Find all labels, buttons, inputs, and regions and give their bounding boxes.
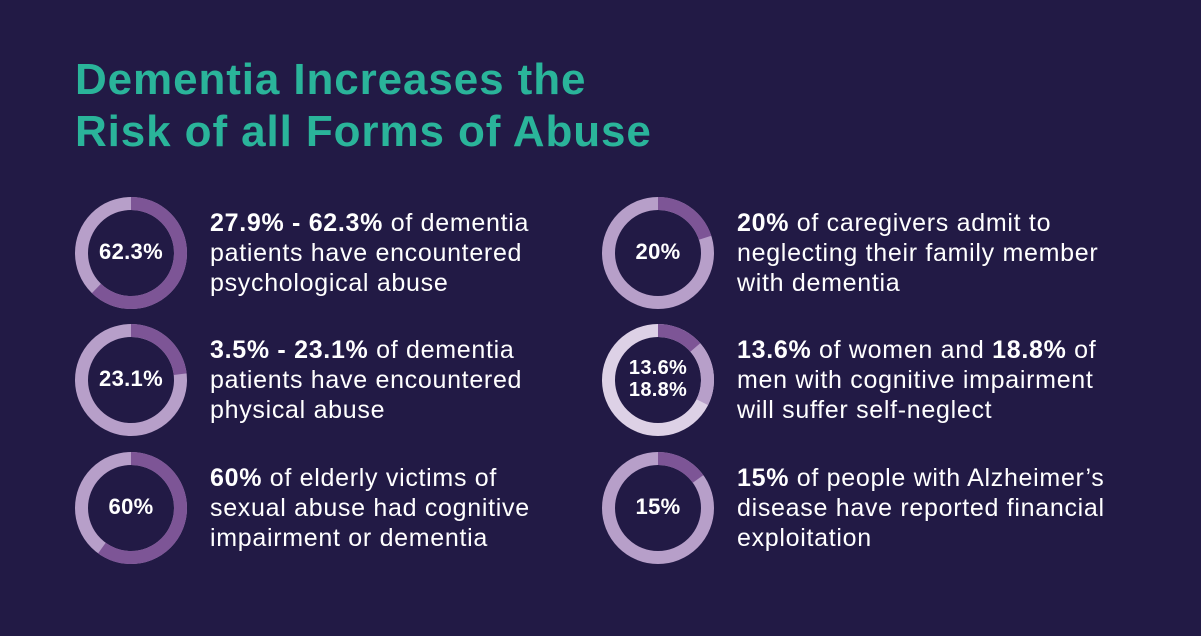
text — [210, 209, 529, 297]
donut 23.1 — [75, 324, 187, 436]
text: men with cognitive impairment — [737, 366, 1094, 394]
item: caregiver neglect — [602, 197, 1098, 309]
text: neglecting their family member — [737, 239, 1098, 267]
item: physical abuse — [75, 324, 522, 436]
label: 15% — [636, 494, 680, 519]
text: 60% of elderly victims of — [210, 464, 497, 492]
text: will suffer self-neglect — [737, 396, 992, 424]
text — [737, 336, 1096, 424]
label: 20% — [636, 239, 680, 264]
text: 15% of people with Alzheimer’s — [737, 464, 1105, 492]
text: patients have encountered — [210, 366, 522, 394]
title: Risk of all Forms of Abuse — [75, 107, 652, 156]
text: 13.6% of women and 18.8% of — [737, 336, 1096, 364]
item: financial exploitation — [602, 452, 1105, 564]
text: with dementia — [737, 269, 900, 297]
donut 60 — [75, 452, 187, 564]
text: sexual abuse had cognitive — [210, 494, 530, 522]
text: disease have reported financial — [737, 494, 1105, 522]
donut 13.6/18.8 — [602, 324, 714, 436]
text — [210, 336, 522, 424]
label: 18.8% — [629, 379, 687, 401]
text: 20% of caregivers admit to — [737, 209, 1051, 237]
item: psychological abuse — [75, 197, 529, 309]
text: physical abuse — [210, 396, 385, 424]
text: 27.9% - 62.3% of dementia — [210, 209, 529, 237]
label: 62.3% — [99, 239, 163, 264]
donut 15 — [602, 452, 714, 564]
text: impairment or dementia — [210, 524, 488, 552]
text — [737, 209, 1098, 297]
text: psychological abuse — [210, 269, 448, 297]
item: sexual abuse — [75, 452, 530, 564]
label — [629, 357, 687, 401]
item: self-neglect — [602, 324, 1096, 436]
donut 62.3 — [75, 197, 187, 309]
label: 13.6% — [629, 357, 687, 379]
text — [210, 464, 530, 552]
text: exploitation — [737, 524, 872, 552]
text: patients have encountered — [210, 239, 522, 267]
label: 60% — [109, 494, 153, 519]
donut 20 — [602, 197, 714, 309]
label: 23.1% — [99, 366, 163, 391]
title: Dementia Increases the — [75, 55, 586, 104]
text — [737, 464, 1105, 552]
text: 3.5% - 23.1% of dementia — [210, 336, 514, 364]
title — [75, 55, 652, 156]
